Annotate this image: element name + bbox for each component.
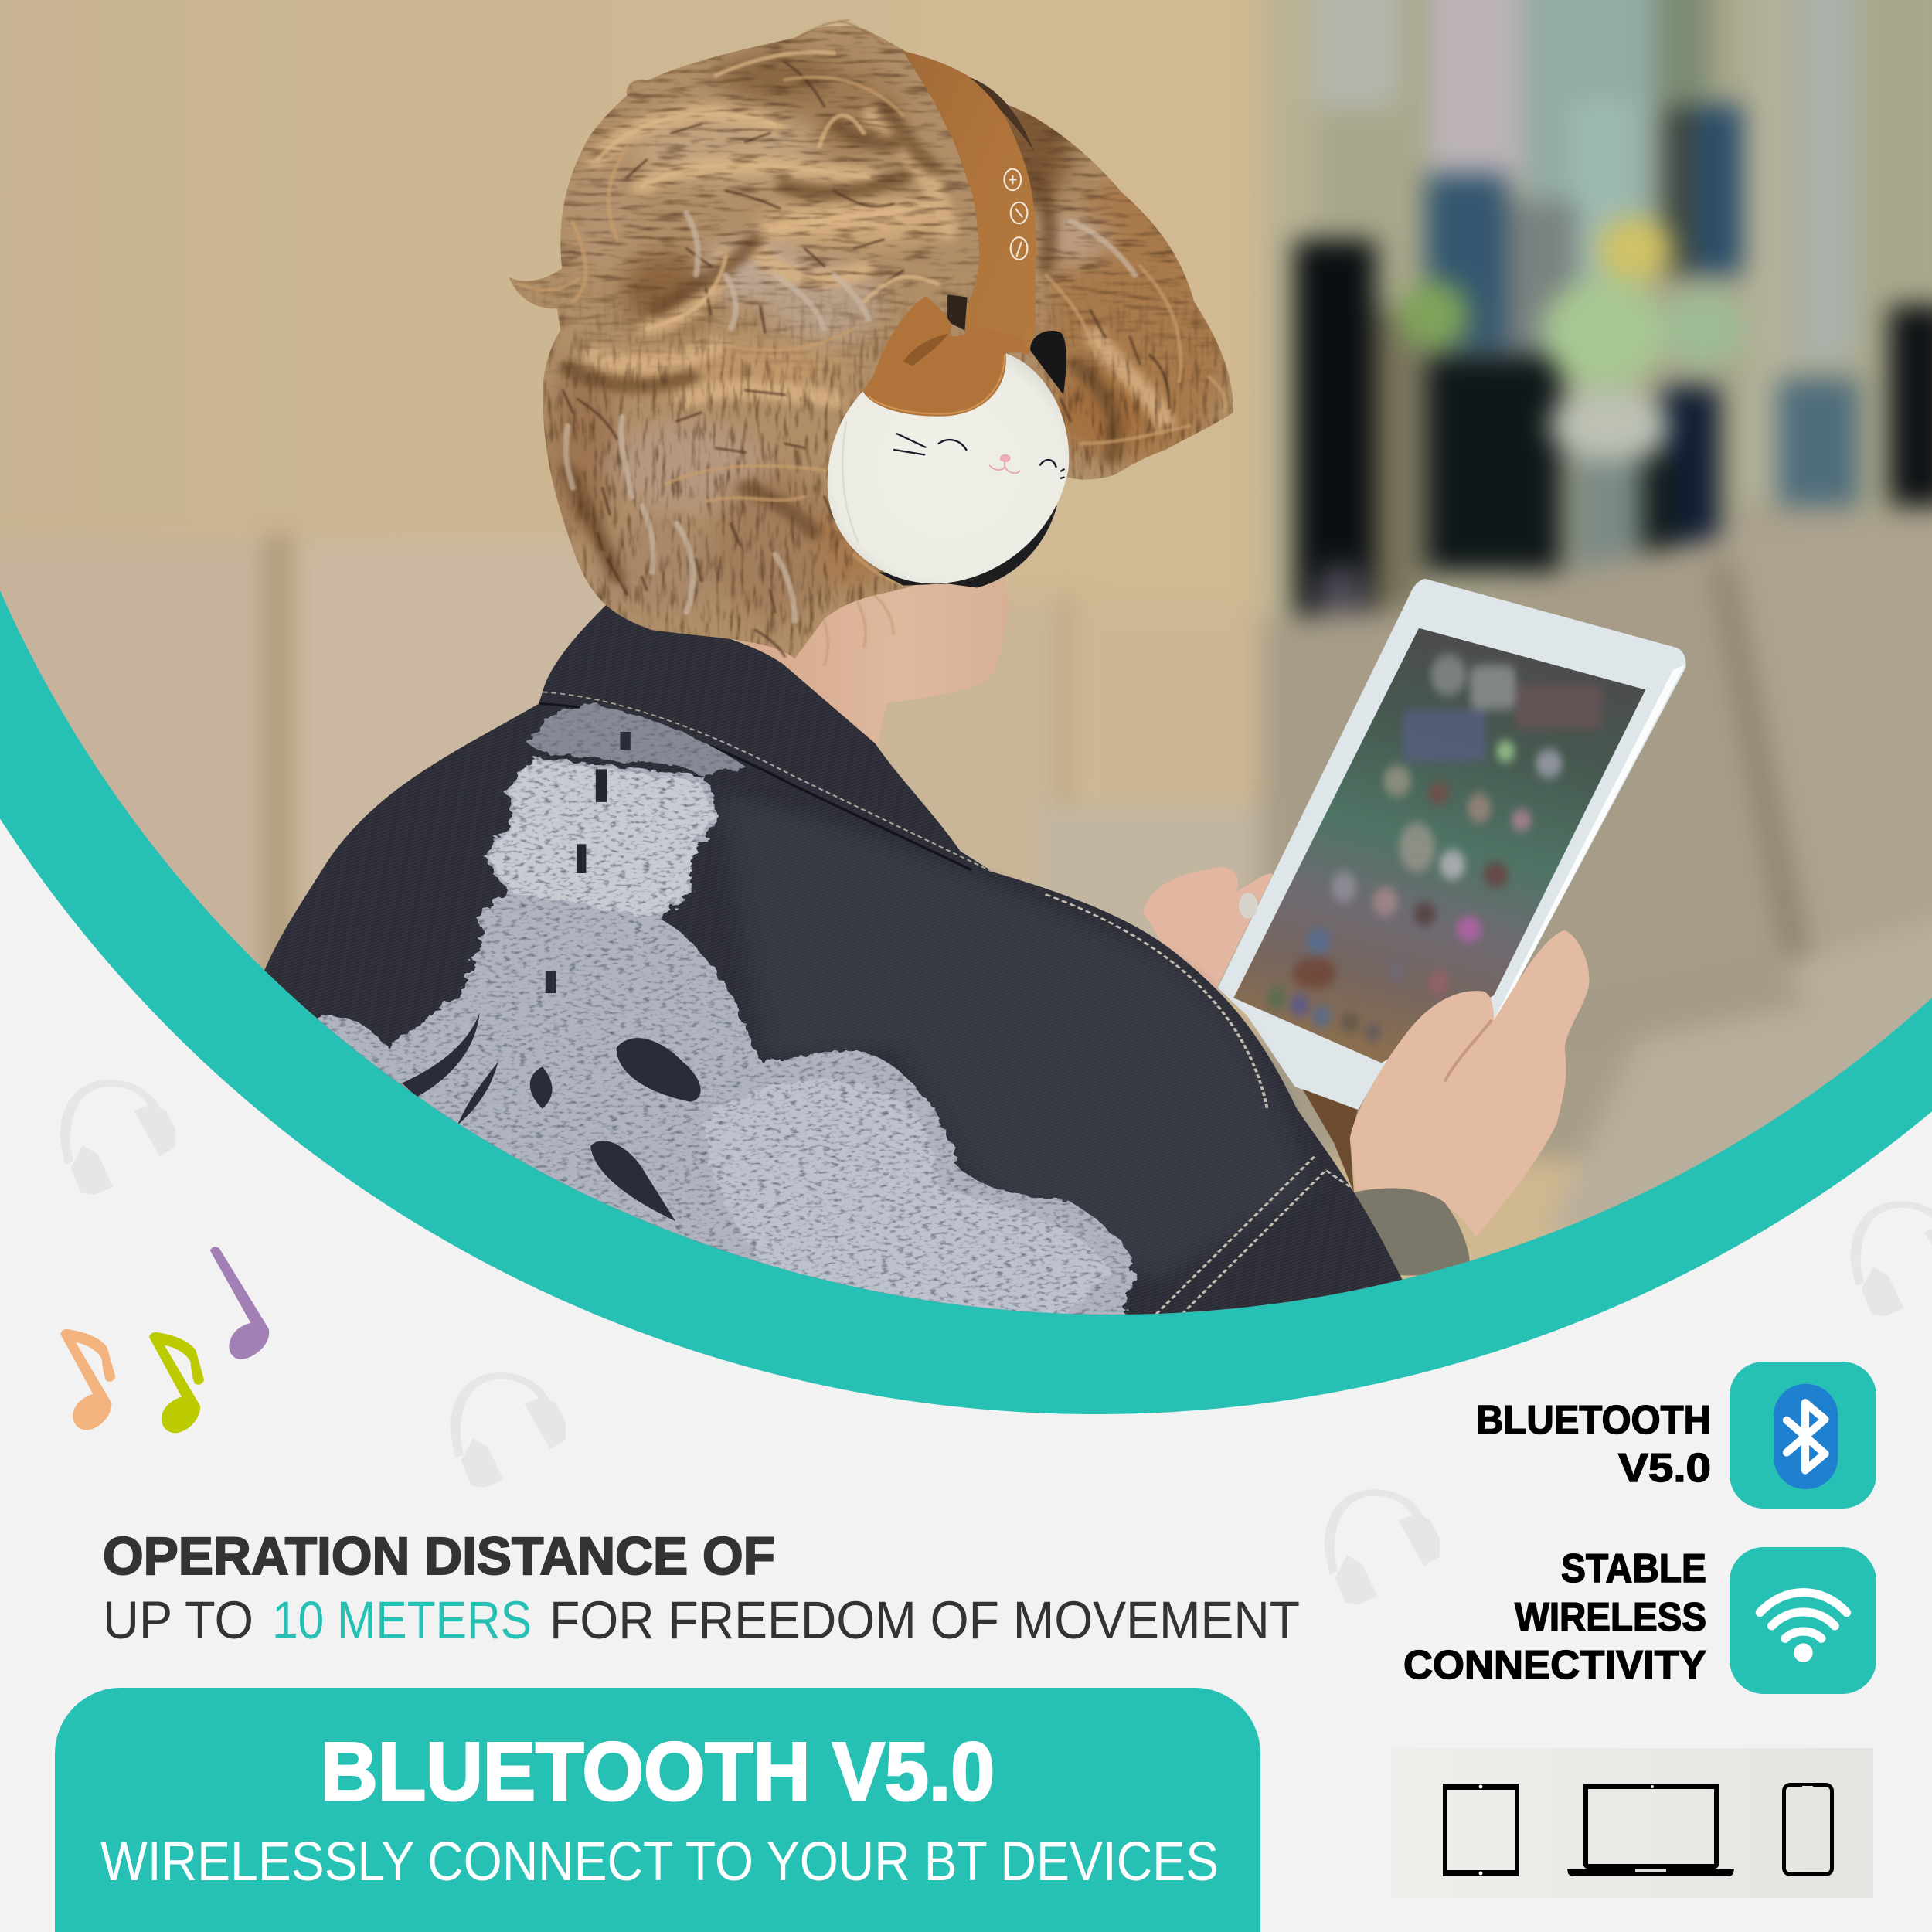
inner ear shade <box>903 334 948 366</box>
hair golden highlight strands <box>597 52 937 328</box>
text: operation distance description: FOR FREEDOM OF MOVEMENT <box>549 1590 1300 1650</box>
neck and jaw <box>734 541 1009 746</box>
print cloud highlights <box>705 1080 1112 1329</box>
text: operation distance description: UP TO <box>103 1590 253 1650</box>
icon: bluetooth tile <box>1730 1362 1876 1509</box>
finger shadow <box>1444 1020 1492 1082</box>
icon: wifi tile <box>1730 1547 1876 1694</box>
print brighter tower <box>487 760 713 917</box>
icon: phone device <box>1784 1785 1832 1875</box>
teal arc band <box>0 0 1932 1414</box>
banner subtitle: WIRELESSLY CONNECT TO YOUR BT DEVICES <box>100 1832 1219 1893</box>
hair base mass <box>479 0 1268 709</box>
label: stable wireless connectivity: CONNECTIVITY <box>1403 1643 1706 1688</box>
collar seam stitching <box>543 692 994 872</box>
jacket lit shoulder <box>720 795 1311 1282</box>
text: operation distance heading: OPERATION DISTANCE OF <box>103 1526 775 1586</box>
tablet edge highlight <box>1494 665 1685 1020</box>
hair dark vertical streak texture <box>479 0 1268 709</box>
cup seam <box>842 421 859 543</box>
hair flyaway strands on top <box>631 20 883 91</box>
shoulder seam stitching <box>1046 894 1267 1109</box>
cat nose and mouth <box>990 455 1019 473</box>
white cat face cup <box>828 352 1069 583</box>
print dark holes <box>617 1038 701 1102</box>
ring <box>1239 893 1257 918</box>
curly hair <box>479 0 1268 709</box>
tablet frame <box>1218 579 1685 1110</box>
headband <box>903 51 1036 355</box>
hair broad light and dark lobes <box>568 107 1165 577</box>
orange music note <box>60 1329 115 1430</box>
hair muted ash strands <box>566 213 1135 621</box>
headband control buttons <box>1004 169 1027 260</box>
painted skeleton print on jacket <box>317 706 1134 1338</box>
patch seam <box>869 355 1005 413</box>
tablet <box>1218 579 1685 1110</box>
hair fine dark flecks <box>563 62 1169 657</box>
brown cat patch and ear <box>862 296 1029 417</box>
jacket cuff sleeve <box>1354 1188 1471 1275</box>
hair dark streak texture <box>479 0 1268 709</box>
purple music note <box>210 1247 269 1359</box>
icon: tablet device <box>1443 1784 1519 1876</box>
label: bluetooth v5.0: V5.0 <box>1618 1446 1711 1491</box>
label: bluetooth v5.0: BLUETOOTH <box>1476 1398 1711 1443</box>
panel: compatible devices <box>1390 1748 1873 1898</box>
label: stable wireless connectivity: WIRELESS <box>1515 1595 1706 1640</box>
label: stable wireless connectivity <box>1403 1546 1706 1688</box>
hair loose wisps on neck <box>825 594 893 665</box>
dark gap under headband <box>947 294 968 331</box>
pocket stitching <box>1156 1155 1352 1314</box>
dark hair shadow behind headband <box>964 76 1034 151</box>
hands holding tablet <box>1143 867 1589 1275</box>
right hand <box>1350 930 1589 1237</box>
cat face embroidery <box>894 434 1064 478</box>
photo background: wall, couch and blurred shelves <box>0 0 1932 1352</box>
denim jacket <box>261 602 1452 1376</box>
headphone watermark 2 <box>451 1372 566 1488</box>
label: stable wireless connectivity: STABLE <box>1561 1546 1706 1591</box>
headphone watermark 1 <box>60 1080 175 1195</box>
text: operation distance description: 10 METERS <box>272 1590 532 1650</box>
banner title: BLUETOOTH V5.0 <box>321 1725 995 1818</box>
print upper band <box>528 706 746 777</box>
tablet screen <box>1233 628 1645 1063</box>
tablet screen app icons <box>1267 655 1602 1041</box>
headphone watermark 4 <box>1851 1201 1932 1316</box>
print main body <box>317 757 1134 1338</box>
black ear <box>1030 331 1066 395</box>
label: bluetooth v5.0 <box>1476 1398 1711 1491</box>
photo: child with cat headphones using a tablet <box>0 0 1932 1376</box>
hair warm mid strands <box>519 77 1226 586</box>
hair tonal regions <box>548 53 1233 621</box>
headphone watermark 3 <box>1325 1489 1440 1604</box>
green music note <box>149 1332 204 1433</box>
cat ear headphones <box>828 51 1069 588</box>
music notes <box>60 1247 269 1433</box>
panel: bluetooth banner <box>55 1688 1260 1932</box>
left hand fingers <box>1143 867 1273 988</box>
black lower ear cushion <box>879 505 1057 588</box>
text: operation distance description <box>103 1590 1300 1650</box>
gap shadow under tablet <box>1303 1089 1358 1192</box>
icon: laptop device <box>1567 1784 1734 1876</box>
